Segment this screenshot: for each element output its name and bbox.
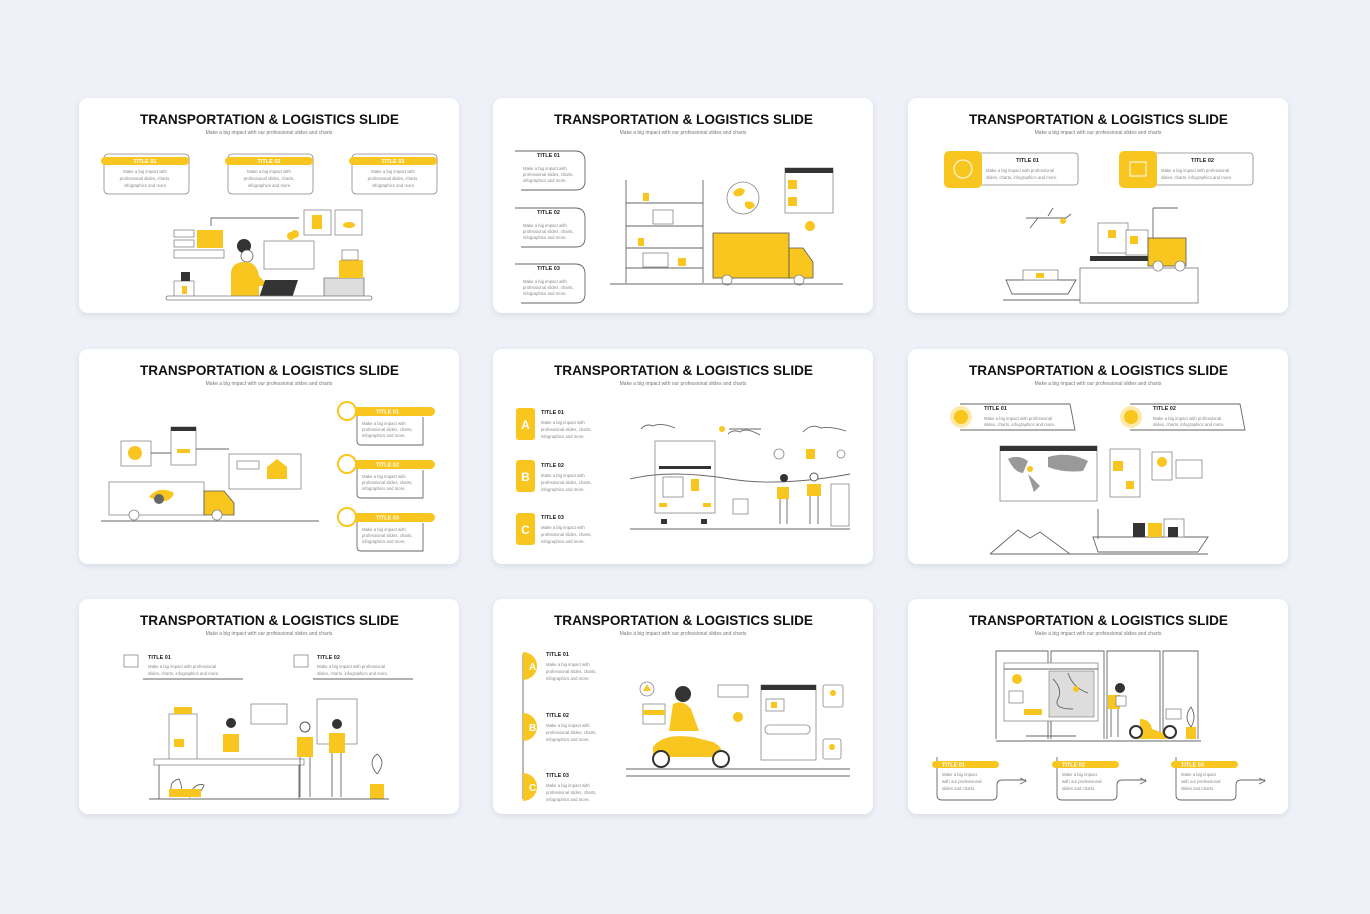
ABC timeline list: TITLE 01 [546,652,569,658]
title rows with circle icons: Make a big impact with professional [1153,416,1221,421]
ABC list: B [521,470,530,484]
title: Make a big impact with our professional slides and charts [620,130,747,136]
text boxes with icons: Make a big impact with professional [1161,168,1229,173]
text boxes with icons: slides, charts, infographics and more. [986,175,1057,180]
timeline title blocks: Make a big impact [1062,772,1098,777]
text boxes with icons: Make a big impact with professional [986,168,1054,173]
ABC list: A [521,418,530,432]
ABC list: Make a big impact with [541,473,585,478]
text boxes with icons: TITLE 01 [1016,158,1039,164]
title: Make a big impact with our professional slides and charts [206,381,333,387]
text list: titles: TITLE 02 [537,210,560,216]
title: TRANSPORTATION & LOGISTICS SLIDE [140,612,399,628]
title: Make a big impact with our professional slides and charts [620,381,747,387]
timeline title blocks: with our professional [1062,779,1101,784]
panel: slide 3 [908,98,1288,313]
title rows with circle icons: Make a big impact with professional [984,416,1052,421]
text boxes: titles 01-03: Make a big impact with [123,169,167,174]
text list with yellow pills: infographics and more. [362,486,406,491]
text boxes: titles 01-03: Make a big impact with [247,169,291,174]
title [969,362,1228,387]
title [140,612,399,637]
text list with yellow pills [338,402,435,551]
title: Make a big impact with our professional slides and charts [1035,631,1162,637]
ABC timeline list: professional slides, charts, [546,669,597,674]
ABC timeline list: Make a big impact with [546,723,590,728]
text boxes: titles 01-03: TITLE 02 [258,159,280,165]
title [969,111,1228,136]
timeline title blocks [932,757,1265,800]
timeline title blocks: slides and charts. [942,786,975,791]
text list with yellow pills: Make a big impact with [362,421,406,426]
panel: slide 1 [79,98,459,313]
panel: slide 5 [493,349,873,564]
text list: titles: infographics and more. [523,178,567,183]
illustration: monitor map and scooter [996,651,1201,741]
panel: slide 4 [79,349,459,564]
ABC list: infographics and more. [541,539,585,544]
ABC timeline list [523,652,597,802]
text list: titles: Make a big impact with [523,279,567,284]
text list with yellow pills: infographics and more. [362,539,406,544]
illustration: delivery truck [101,427,319,521]
title: TRANSPORTATION & LOGISTICS SLIDE [554,612,813,628]
ABC list: C [521,523,530,537]
text list with yellow pills: TITLE 03 [376,516,399,522]
panel: slide 8 [493,599,873,814]
text list with yellow pills: Make a big impact with [362,527,406,532]
title: TRANSPORTATION & LOGISTICS SLIDE [140,362,399,378]
ABC list: infographics and more. [541,487,585,492]
title: Make a big impact with our professional slides and charts [1035,381,1162,387]
text boxes: titles 01-03: infographics and more [372,183,415,188]
illustration: plane, ship, forklift [1003,208,1198,303]
text list with yellow pills: TITLE 01 [376,410,399,416]
title: TRANSPORTATION & LOGISTICS SLIDE [554,362,813,378]
timeline title blocks: slides and charts. [1181,786,1214,791]
text list with yellow pills: TITLE 02 [376,462,399,468]
panel: slide 2 [493,98,873,313]
text list with yellow pills: professional slides, charts, [362,427,413,432]
panel: slide 7 [79,599,459,814]
text boxes: titles 01-03: TITLE 01 [134,159,156,165]
ABC timeline list: C [529,783,536,794]
timeline title blocks: with our professional [1181,779,1220,784]
text list with yellow pills: Make a big impact with [362,474,406,479]
ABC timeline list: professional slides, charts, [546,730,597,735]
timeline title blocks: TITLE 02 [1062,762,1085,768]
timeline title blocks: TITLE 01 [942,762,965,768]
text list: titles: infographics and more. [523,291,567,296]
timeline title blocks: slides and charts. [1062,786,1095,791]
title rows with circle icons [950,404,1245,430]
ABC timeline list: professional slides, charts, [546,790,597,795]
title rows: Make a big impact with professional [317,664,385,669]
ABC timeline list: Make a big impact with [546,662,590,667]
ABC list: Make a big impact with [541,420,585,425]
timeline title blocks: with our professional [942,779,981,784]
text boxes: titles 01-03: infographics and more [248,183,291,188]
title rows: TITLE 01 [148,655,171,661]
timeline title blocks: Make a big impact [1181,772,1217,777]
title rows: slides, charts, infographics and more. [317,671,388,676]
panel: slide 6 [908,349,1288,564]
ABC list: TITLE 02 [541,463,564,469]
title: Make a big impact with our professional slides and charts [206,130,333,136]
ABC timeline list: TITLE 02 [546,713,569,719]
title [140,111,399,136]
illustration: person at laptop [166,210,372,300]
ABC timeline list: B [529,723,536,734]
title rows with circle icons: TITLE 02 [1153,406,1176,412]
text list: titles: TITLE 01 [537,153,560,159]
text list with yellow pills: infographics and more. [362,433,406,438]
illustration: warehouse and truck [610,168,843,285]
text list with yellow pills: professional slides, charts, [362,533,413,538]
illustration: office desk and people [149,699,389,799]
ABC timeline list: infographics and more. [546,737,590,742]
title [554,111,813,136]
text boxes with icons [944,151,1253,188]
title [554,362,813,387]
text list: titles: Make a big impact with [523,166,567,171]
text boxes with icons: TITLE 02 [1191,158,1214,164]
title [140,362,399,387]
title: Make a big impact with our professional slides and charts [206,631,333,637]
ABC timeline list: A [529,662,536,673]
text boxes: titles 01-03: Make a big impact with [371,169,415,174]
text boxes: titles 01-03: professional slides, charts, [244,176,294,181]
text boxes: titles 01-03: TITLE 03 [382,159,404,165]
ABC timeline list: Make a big impact with [546,783,590,788]
title: TRANSPORTATION & LOGISTICS SLIDE [969,612,1228,628]
text boxes: titles 01-03: professional slides, charts, [120,176,170,181]
ABC timeline list: infographics and more. [546,676,590,681]
title [969,612,1228,637]
title [554,612,813,637]
ABC timeline list: TITLE 03 [546,773,569,779]
text list: titles [515,151,585,303]
panel: slide 9 [908,599,1288,814]
text list with yellow pills: professional slides, charts, [362,480,413,485]
text list: titles: infographics and more. [523,235,567,240]
title rows: Make a big impact with professional [148,664,216,669]
text boxes: titles 01-03 [101,154,437,194]
ABC list: TITLE 01 [541,410,564,416]
ABC list [516,408,592,545]
text list: titles: professional slides, charts, [523,172,574,177]
text list: titles: professional slides, charts, [523,285,574,290]
text list: titles: professional slides, charts, [523,229,574,234]
title rows [124,655,413,679]
ABC timeline list: infographics and more. [546,797,590,802]
illustration: scooter delivery [626,682,850,776]
title rows with circle icons: TITLE 01 [984,406,1007,412]
title: Make a big impact with our professional slides and charts [1035,130,1162,136]
ABC list: professional slides, charts, [541,427,592,432]
text boxes: titles 01-03: infographics and more [124,183,167,188]
title: TRANSPORTATION & LOGISTICS SLIDE [140,111,399,127]
title: TRANSPORTATION & LOGISTICS SLIDE [969,362,1228,378]
illustration: world map and cargo ship [990,446,1208,554]
title rows with circle icons: slides, charts, infographics and more. [1153,422,1224,427]
ABC list: TITLE 03 [541,515,564,521]
title: TRANSPORTATION & LOGISTICS SLIDE [969,111,1228,127]
title rows with circle icons: slides, charts, infographics and more. [984,422,1055,427]
text list: titles: Make a big impact with [523,223,567,228]
ABC list: Make a big impact with [541,525,585,530]
text list: titles: TITLE 03 [537,266,560,272]
title rows: slides, charts, infographics and more. [148,671,219,676]
text boxes with icons: slides, charts, infographics and more. [1161,175,1232,180]
illustration: unloading truck [630,424,850,529]
timeline title blocks: TITLE 03 [1181,762,1204,768]
ABC list: infographics and more. [541,434,585,439]
title rows: TITLE 02 [317,655,340,661]
title: TRANSPORTATION & LOGISTICS SLIDE [554,111,813,127]
text boxes: titles 01-03: professional slides, charts, [368,176,418,181]
ABC list: professional slides, charts, [541,480,592,485]
timeline title blocks: Make a big impact [942,772,978,777]
title: Make a big impact with our professional slides and charts [620,631,747,637]
ABC list: professional slides, charts, [541,532,592,537]
